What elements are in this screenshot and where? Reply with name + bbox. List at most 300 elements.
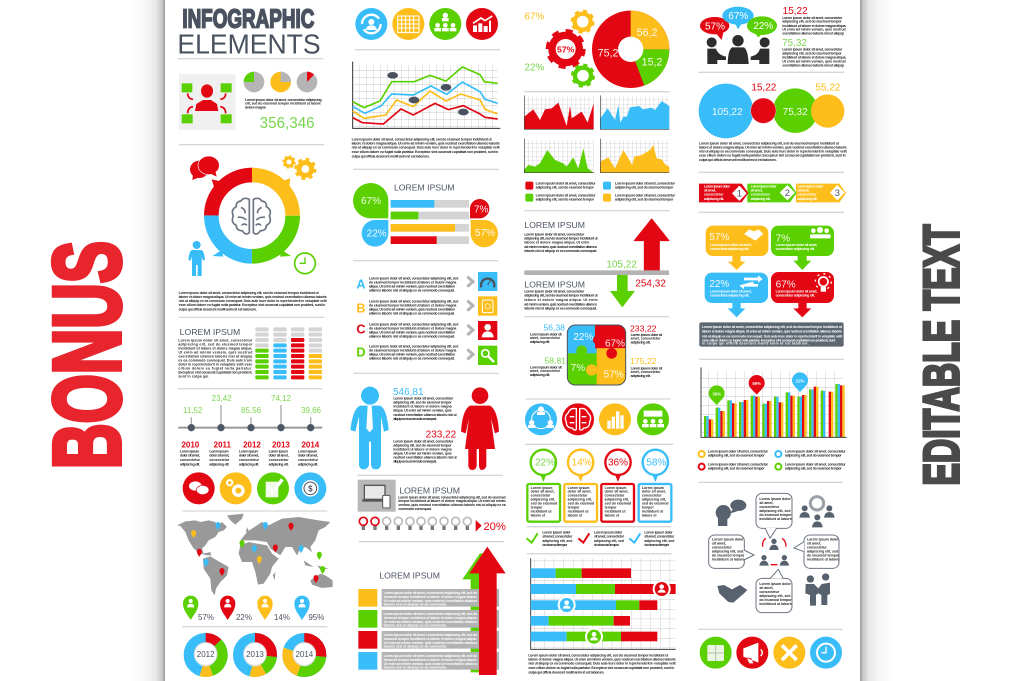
area chart legend: Lorem ipsum dolor sit amet, consectetur xyxy=(536,194,596,198)
list A B C D: aliqua. Ut enim ad minim veniam, quis nostrud exercitation xyxy=(369,352,455,356)
checklist: adipiscing elit, sed xyxy=(594,539,624,543)
list A B C D: D xyxy=(356,346,365,360)
card: red xyxy=(771,272,834,317)
checklist: do eiusmod tempor xyxy=(542,543,568,547)
callout rings with text boxes: dolor sit amet, xyxy=(531,490,555,494)
panel: stacked list with rising arrows: Ut enim ad minim veniam, quis nostrud exercitation ullamco xyxy=(384,599,477,603)
area chart legend: adipiscing elit, sed do eiusmod tempor xyxy=(536,198,595,202)
text block: cillum dolore eu fugiat nulla pariatur. xyxy=(178,366,252,370)
list A B C D: Lorem ipsum dolor sit amet, consectetur adipiscing elit, sed xyxy=(369,323,458,327)
callout rings with text boxes: incididunt ut xyxy=(605,509,626,513)
list A B C D: do eiusmod tempor incididunt ut labore et dolore magna xyxy=(369,280,456,284)
text block: esse cillum dolore eu fugiat nulla pariatur. Excepteur sint occaecat cupidatat non proident, sunt in xyxy=(528,666,674,670)
bubble chart: 105,22 xyxy=(712,107,743,118)
stat and text: 75,32 xyxy=(782,38,807,49)
timeline: dolor sit amet, xyxy=(298,454,318,458)
icon row: bottom xyxy=(700,637,842,669)
text block: nisi ut aliquip ex ea commodo consequat. Duis aute irure dolor in reprehenderit in voluptate velit xyxy=(699,150,847,154)
location pins with percentages xyxy=(183,596,324,622)
list A B C D: aliqua. Ut enim ad minim veniam, quis nostrud exercitation xyxy=(369,284,455,288)
icon row 1 xyxy=(183,472,326,504)
map pins xyxy=(191,522,325,583)
icon: two men shaking hands xyxy=(805,573,830,606)
text block: nisi ut aliquip ex ea commodo consequat. Duis aute irure dolor in reprehenderit in voluptate velit xyxy=(352,146,500,150)
callout rings with text boxes: labore et xyxy=(568,513,583,517)
panel: stacked list with rising arrows: eiusmod tempor incididunt ut labore et dolore magna aliqua. xyxy=(384,637,477,641)
timeline: consectetur xyxy=(180,458,201,462)
checklist: sit amet, consectetur xyxy=(594,535,625,539)
stat and text: adipiscing elit, sed do eiusmod tempor xyxy=(782,20,842,24)
icon row: top xyxy=(355,8,498,40)
speech box text: sit amet, xyxy=(807,542,821,546)
checklist xyxy=(527,530,675,547)
text block: tempor incididunt ut labore et dolore magna aliqua. Ut enim ad minim xyxy=(398,499,506,503)
speech box text: incididunt ut labore xyxy=(712,558,744,562)
speech box text: Lorem ipsum dolor xyxy=(759,497,792,501)
light bulb meter: 20% xyxy=(483,521,506,533)
icon: speech bubbles xyxy=(190,156,219,180)
text block: esse cillum dolore eu fugiat nulla pariatur. Excepteur sint occaecat cupidatat non proident, sunt in xyxy=(179,303,325,307)
heading: LOREM IPSUM xyxy=(399,486,460,496)
list A B C D: aliqua. Ut enim ad minim veniam, quis nostrud exercitation xyxy=(369,331,455,335)
timeline: 23,42 xyxy=(212,394,232,403)
numbered ribbon: consectetur xyxy=(704,193,724,197)
speech box text: do eiusmod tempor xyxy=(712,554,745,558)
timeline: dolor sit amet, xyxy=(209,454,229,458)
puzzle callouts: Lorem ipsum dolor sit xyxy=(530,365,562,369)
stat: blue value and text: adipiscing elit, sed do eiusmod tempor xyxy=(393,400,452,404)
text block: dolor in reprehenderit in voluptate velit esse xyxy=(178,362,252,366)
timeline: adipiscing elit. xyxy=(298,462,318,466)
side heading: BONUS: BONUS xyxy=(34,241,140,469)
dark text panel: Lorem ipsum dolor sit amet, consectetur adipiscing elit, sed do eiusmod tempor incididunt ut xyxy=(702,325,843,329)
speech box text: adipiscing elit, sed xyxy=(759,509,791,513)
timeline: Lorem ipsum xyxy=(209,450,229,454)
title xyxy=(177,4,321,59)
card: red: Lorem ipsum dolor sit amet, xyxy=(776,290,817,294)
stat and text: 15,22 xyxy=(783,6,808,17)
grouped bar chart: 89% xyxy=(752,381,761,386)
bar chart legend: adipiscing elit, sed do eiusmod tempor xyxy=(785,454,842,458)
text block: laboris nisi ut aliquip ex ea commodo consequat. xyxy=(524,307,597,311)
text block: ad minim veniam, quis nostrud exercitation ullamco xyxy=(524,302,597,306)
column 3 xyxy=(524,11,676,674)
numbered ribbon: 2 xyxy=(785,188,790,198)
dark text panel: labore et dolore magna aliqua. Ut enim ad minim veniam, quis nostrud exercitation ullamco laboris xyxy=(702,330,842,334)
puzzle callouts: amet, consectetur xyxy=(530,369,561,373)
numbered ribbon: adipiscing elit. xyxy=(797,197,817,201)
title: INFOGRAPHIC xyxy=(182,4,314,34)
pie chart: 75,2 xyxy=(598,48,618,60)
puzzle callouts xyxy=(530,323,663,378)
card: red: consectetur adipiscing elit. xyxy=(776,294,815,298)
callout rings with text boxes: tempor xyxy=(642,505,654,509)
panel: stacked list with rising arrows: eiusmod tempor incididunt ut labore et dolore magna aliqua. xyxy=(384,616,477,620)
donut charts by year: 2014 xyxy=(295,650,314,659)
text block xyxy=(179,291,327,311)
panel: stacked list with rising arrows: Lorem ipsum dolor sit amet, consectetur adipiscing elit, sed do xyxy=(384,612,477,616)
arrow down xyxy=(610,275,635,307)
callout rings with text boxes: adipiscing elit, xyxy=(605,497,629,501)
card: blue: 22% xyxy=(709,279,729,290)
speech bubbles with percentages: 22% xyxy=(753,21,773,32)
callout rings with text boxes: Lorem ipsum xyxy=(568,486,590,490)
icon row xyxy=(525,403,669,435)
puzzle callouts: adipiscing elit. xyxy=(530,340,550,344)
text block: adipiscing elit, sed do eiusmod tempor xyxy=(178,342,253,346)
list A B C D: C xyxy=(356,322,365,336)
speech box text: incididunt ut labore xyxy=(807,558,839,562)
card: blue: consectetur adipiscing elit. xyxy=(710,294,749,298)
text block: Lorem ipsum dolor sit amet, consectetur adipiscing elit, sed do eiusmod tempor incididunt ut xyxy=(699,141,840,145)
panel: stacked list with rising arrows: laboris nisi ut aliquip ex ea commodo. xyxy=(384,665,447,669)
puzzle callouts: 233,22 xyxy=(630,324,657,334)
timeline: Lorem ipsum xyxy=(298,450,317,454)
card: green xyxy=(771,226,834,270)
timeline: 11,52 xyxy=(183,406,203,415)
callout rings with text boxes: sed do eiusmod xyxy=(531,501,557,505)
text block: Lorem ipsum dolor sit amet, consectetur adipiscing elit, sed do eiusmod tempor incididunt ut xyxy=(352,137,492,141)
stat: red value and text: adipiscing elit, sed do eiusmod tempor xyxy=(393,443,452,447)
text block: ad minim veniam, quis nostrud exercitation ullamco xyxy=(524,245,597,249)
panel: stacked list with rising arrows: Lorem ipsum dolor sit amet, consectetur adipiscing elit, sed do xyxy=(384,633,477,637)
text block: culpa qui officia deserunt mollit anim id est laborum. xyxy=(352,154,430,158)
percent labels: 22% xyxy=(524,63,544,74)
world map xyxy=(177,514,333,595)
list A B C D: B xyxy=(356,302,365,316)
timeline: consectetur xyxy=(209,458,230,462)
text block xyxy=(398,495,506,511)
speech bubbles with percentages xyxy=(700,7,777,40)
text block: Lorem ipsum dolor sit amet, consectetur xyxy=(524,290,585,294)
puzzle callouts: 58,81 xyxy=(544,355,566,365)
heading: LOREM IPSUM xyxy=(379,570,440,580)
timeline xyxy=(178,394,322,466)
timeline: dolor sit amet, xyxy=(180,454,200,458)
text block xyxy=(524,290,598,311)
checklist: Lorem ipsum dolor xyxy=(594,530,623,534)
speech bubbles with percentages: 67% xyxy=(728,11,748,22)
segmented column meter xyxy=(255,327,322,379)
bar chart legend: adipiscing elit, sed do eiusmod tempor xyxy=(708,454,765,458)
timeline: dolor sit amet, xyxy=(269,454,289,458)
text block: Lorem ipsum dolor sit amet, consectetur adipiscing elit, sed do eiusmod tempor incididunt ut xyxy=(528,654,669,658)
callout rings with text boxes: adipiscing elit, xyxy=(568,497,592,501)
speech bubbles with percentages: 57% xyxy=(705,21,725,32)
horizontal stacked bar chart xyxy=(531,558,676,649)
list A B C D xyxy=(356,272,497,365)
puzzle callouts: amet, consectetur xyxy=(631,336,661,340)
dark text panel: in culpa qui officia deserunt mollit anim id est laborum. xyxy=(702,342,809,346)
stat: blue value and text: incididunt ut labore et dolore magna xyxy=(393,404,452,408)
text block: nisi ut aliquip ex ea commodo consequat. Duis aute irure dolor in reprehenderit in voluptate velit xyxy=(179,299,327,303)
panel: stacked list with rising arrows: laboris nisi ut aliquip ex ea commodo. xyxy=(384,644,447,648)
card: green: Lorem ipsum dolor sit amet, xyxy=(776,243,817,247)
heading: LOREM IPSUM xyxy=(180,327,240,337)
callout rings with text boxes: sed do eiusmod xyxy=(568,501,594,505)
puzzle callouts: adipiscing elit. xyxy=(530,373,550,377)
callout rings with text boxes: adipiscing elit, xyxy=(642,497,666,501)
callout rings with text boxes: dolor sit amet, xyxy=(605,490,629,494)
speech box text: do eiusmod tempor xyxy=(807,554,840,558)
text block xyxy=(178,338,253,378)
list A B C D: Lorem ipsum dolor sit amet, consectetur adipiscing elit, sed xyxy=(369,300,458,304)
small pie charts xyxy=(244,72,317,92)
area chart legend: adipiscing elit, sed do eiusmod tempor xyxy=(615,185,674,189)
timeline: 2010 xyxy=(181,441,200,450)
puzzle xyxy=(567,325,626,385)
timeline: adipiscing elit. xyxy=(269,462,289,466)
bar chart legend: Lorem ipsum dolor sit amet, consectetur xyxy=(785,462,846,466)
stat: red value and text: nostrud exercitation ullamco laboris nisi ut xyxy=(393,456,457,460)
percent labels xyxy=(524,11,544,74)
dark text panel: esse cillum dolore eu fugiat nulla pariatur. Excepteur sint occaecat cupidatat non proident, sunt xyxy=(702,338,836,342)
panel: stacked list with rising arrows: laboris nisi ut aliquip ex ea commodo. xyxy=(384,602,447,606)
checklist: adipiscing elit, sed xyxy=(644,539,674,543)
text block: esse cillum dolore eu fugiat nulla pariatur. Excepteur sint occaecat cupidatat non proident, sunt in xyxy=(699,154,846,158)
text block: Ut enim ad minim veniam, quis nostrud xyxy=(178,350,252,354)
arrow up xyxy=(634,219,669,270)
icon: head with speech bubble xyxy=(716,500,746,526)
speech box text: sit amet, xyxy=(759,501,774,505)
text block: culpa qui officia deserunt mollit anim id est laborum. xyxy=(699,158,777,162)
panel: stacked list with rising arrows: Ut enim ad minim veniam, quis nostrud exercitation ullamco xyxy=(384,662,477,666)
callout rings with text boxes: sed do eiusmod xyxy=(605,501,631,505)
numbered ribbon: consectetur xyxy=(797,193,817,197)
callout rings with text boxes: Lorem ipsum xyxy=(531,486,553,490)
numbered ribbon: sit amet, xyxy=(704,189,716,193)
puzzle callouts: Lorem ipsum dolor sit xyxy=(530,332,562,336)
timeline: 2014 xyxy=(301,441,320,450)
checklist: Lorem ipsum dolor xyxy=(644,530,673,534)
progress bars with percent badges: 67% xyxy=(361,196,381,207)
text block xyxy=(245,98,322,109)
stat and text: incididunt ut labore et dolore magna aliqua. xyxy=(782,24,846,28)
numbered ribbon: consectetur xyxy=(751,193,771,197)
speech box text: do eiusmod tempor xyxy=(759,598,792,602)
value: 254,32 xyxy=(635,279,666,290)
panel: stacked list with rising arrows: eiusmod tempor incididunt ut labore et dolore magna aliqua. xyxy=(384,658,477,662)
text block: Lorem ipsum dolor sit amet, consectetur adipiscing xyxy=(245,98,322,102)
callout rings with text boxes: Lorem ipsum xyxy=(642,486,664,490)
timeline: adipiscing elit. xyxy=(180,462,200,466)
callout rings with text boxes: 36% xyxy=(608,458,628,469)
heading: LOREM IPSUM xyxy=(394,182,455,192)
bar chart legend: Lorem ipsum dolor sit amet, consectetur xyxy=(785,450,846,454)
text block: incididunt ut labore et dolore magna aliqua. xyxy=(178,346,252,350)
bar chart legend: Lorem ipsum dolor sit amet, consectetur xyxy=(708,450,769,454)
speech box text xyxy=(712,497,840,606)
column 2 xyxy=(350,8,506,675)
list A B C D: do eiusmod tempor incididunt ut labore et dolore magna xyxy=(369,304,456,308)
bar chart legend: Lorem ipsum dolor sit amet, consectetur xyxy=(708,462,769,466)
stat: blue value and text: 546,81 xyxy=(393,387,424,398)
checklist: sit amet, consectetur xyxy=(542,535,573,539)
bar chart legend: adipiscing elit, sed do eiusmod tempor xyxy=(708,466,765,470)
text block: veniam, quis nostrud exercitation ullamco laboris nisi ut aliquip ex ea xyxy=(398,503,506,507)
list A B C D: ullamco laboris nisi ut aliquip ex ea commodo consequat. xyxy=(369,356,455,360)
bubble chart: 15,22 xyxy=(751,83,777,94)
card: blue: Lorem ipsum dolor sit amet, xyxy=(710,290,752,294)
stat and text xyxy=(782,38,846,67)
speech box text: consectetur xyxy=(712,546,732,550)
timeline: 85,56 xyxy=(241,406,262,415)
callout rings with text boxes xyxy=(527,450,671,522)
area chart legend: Lorem ipsum dolor sit amet, consectetur xyxy=(536,181,596,185)
icon: brain and people xyxy=(799,497,835,527)
text block xyxy=(352,137,500,158)
pie chart: 56,2 xyxy=(637,27,657,39)
stat: red value and text xyxy=(393,429,457,463)
stat and text: Lorem ipsum dolor sit amet, consectetur xyxy=(782,48,843,52)
bubble chart xyxy=(699,83,844,138)
panel: stacked list with rising arrows xyxy=(358,547,506,675)
callout rings with text boxes: tempor xyxy=(568,505,580,509)
text block: Lorem ipsum dolor sit amet, consectetur xyxy=(524,233,585,237)
speech box text: incididunt ut labore xyxy=(759,517,792,521)
timeline: adipiscing elit. xyxy=(209,462,229,466)
speech box text: adipiscing elit, sed xyxy=(807,550,838,554)
text block: nisi ut aliquip ex ea commodo consequat. Duis aute irure dolor in reprehenderit in voluptate velit xyxy=(528,662,676,666)
stat and text: Lorem ipsum dolor sit amet, consectetur xyxy=(782,16,843,20)
text block: dolore magna xyxy=(245,105,266,109)
area chart legend: adipiscing elit, sed do eiusmod tempor xyxy=(536,185,595,189)
panel: stacked list with rising arrows: Ut enim ad minim veniam, quis nostrud exercitation ullamco xyxy=(384,620,477,624)
speech box text: incididunt ut labore xyxy=(759,602,792,606)
puzzle callouts: amet, consectetur xyxy=(530,336,561,340)
location pins with percentages: 57% xyxy=(198,613,214,622)
callout rings with text boxes: adipiscing elit, xyxy=(531,497,555,501)
area charts xyxy=(524,95,669,173)
puzzle callouts: adipiscing elit. xyxy=(631,340,651,344)
list A B C D: ullamco laboris nisi ut aliquip ex ea commodo consequat. xyxy=(369,312,455,316)
puzzle callouts: 56,38 xyxy=(543,323,565,333)
text block: elit, sed do eiusmod tempor incididunt ut labore xyxy=(245,102,321,106)
percent labels: 67% xyxy=(524,11,544,22)
list A B C D: A xyxy=(356,278,365,292)
text block: labore et dolore magna aliqua. Ut enim ad minim veniam, quis nostrud exercitation ullamco laboris xyxy=(352,142,500,146)
stat: blue value and text: aliqua. Ut enim ad minim veniam, quis xyxy=(393,409,452,413)
card: green: 7% xyxy=(776,233,790,244)
stat and text: Ut enim ad minim veniam, quis nostrud xyxy=(782,59,846,63)
stat and text: incididunt ut labore et dolore magna aliqua. xyxy=(782,55,846,59)
numbered ribbon: Lorem ipsum dolor xyxy=(751,185,777,189)
icon: female figure xyxy=(461,387,499,470)
text block: adipiscing elit, sed do eiusmod tempor incididunt ut xyxy=(524,294,598,298)
stat: red value and text: Lorem ipsum dolor sit amet, consectetur xyxy=(393,439,454,443)
speech box text: consectetur xyxy=(807,546,827,550)
callout rings with text boxes: 22% xyxy=(535,458,555,469)
timeline: consectetur xyxy=(239,458,260,462)
heading: LOREM IPSUM xyxy=(524,279,585,289)
numbered ribbon: 1 xyxy=(737,189,742,199)
list A B C D: ullamco laboris nisi ut aliquip ex ea commodo consequat. xyxy=(369,335,455,339)
puzzle callouts: adipiscing elit. xyxy=(631,374,651,378)
gears xyxy=(548,11,594,86)
card: yellow: consectetur adipiscing elit. xyxy=(710,247,749,251)
progress bars with percent badges: 7% xyxy=(474,204,489,215)
timeline: 2011 xyxy=(214,441,232,450)
speech box text: Lorem ipsum dolor xyxy=(807,538,839,542)
card: yellow: 57% xyxy=(709,232,729,243)
stat and text: Ut enim ad minim veniam, quis nostrud xyxy=(782,28,846,32)
progress bars with percent badges xyxy=(353,183,498,247)
stat: red value and text: incididunt ut labore et dolore magna xyxy=(393,447,452,451)
donut charts by year xyxy=(189,638,321,672)
numbered ribbon: adipiscing elit. xyxy=(704,197,724,201)
donut charts by year: 2013 xyxy=(246,650,264,659)
numbered ribbon: Lorem ipsum dolor xyxy=(797,185,824,189)
central people and arrows xyxy=(759,538,789,566)
card: yellow: Lorem ipsum dolor sit amet, xyxy=(710,243,752,247)
text block: culpa qui officia deserunt mollit anim id est laborum. xyxy=(179,307,257,311)
pie chart: 15,2 xyxy=(642,57,662,69)
text block: ex ea commodo consequat. Duis aute irure xyxy=(178,358,252,362)
area chart legend: Lorem ipsum dolor sit amet, consectetur xyxy=(615,181,676,185)
stat: blue value and text: nostrud exercitation ullamco laboris nisi ut xyxy=(393,413,457,417)
title: ELEMENTS xyxy=(177,28,321,59)
icon: clock xyxy=(295,253,315,274)
stat: blue value and text: aliquip ex ea commodo consequat. xyxy=(393,417,437,421)
text block: labore et dolore magna aliqua. Ut enim ad minim veniam, quis nostrud exercitation ullamco laboris xyxy=(699,145,847,149)
list A B C D: aliqua. Ut enim ad minim veniam, quis nostrud exercitation xyxy=(369,308,455,312)
panel: stacked list with rising arrows: Ut enim ad minim veniam, quis nostrud exercitation ullamco xyxy=(384,641,477,645)
progress bars with percent badges: 57% xyxy=(475,228,495,239)
bubble chart: 55,22 xyxy=(815,83,841,94)
panel: person with linked squares xyxy=(179,74,236,130)
text block: commodo consequat. xyxy=(398,507,432,511)
timeline: 74,12 xyxy=(271,394,292,403)
puzzle callouts: amet, consectetur xyxy=(631,370,661,374)
text block: labore et dolore magna aliqua. Ut enim xyxy=(524,298,598,302)
icon: handshake xyxy=(717,585,747,603)
card: blue xyxy=(705,273,768,317)
speech box text: adipiscing elit, sed xyxy=(759,594,791,598)
callout rings with text boxes: consectetur xyxy=(642,494,662,498)
pie chart xyxy=(592,11,669,88)
donut charts by year: 2012 xyxy=(197,650,215,659)
speech box text: consectetur xyxy=(759,505,780,509)
area chart legend: Lorem ipsum dolor sit amet, consectetur xyxy=(615,194,676,198)
timeline: 2013 xyxy=(272,441,290,450)
speech box text: Lorem ipsum dolor xyxy=(759,582,792,586)
timeline: consectetur xyxy=(269,458,289,462)
checklist: sit amet, consectetur xyxy=(644,535,675,539)
numbered ribbon: adipiscing elit. xyxy=(751,197,771,201)
column 4 xyxy=(698,6,847,669)
stat: red value and text: aliqua. Ut enim ad minim veniam, quis xyxy=(393,452,452,456)
bar chart legend: adipiscing elit, sed do eiusmod tempor xyxy=(785,466,842,470)
panel: stacked list with rising arrows: Lorem ipsum dolor sit amet, consectetur adipiscing elit, sed do xyxy=(384,654,477,658)
callout rings with text boxes: 14% xyxy=(572,458,592,469)
grouped bar chart xyxy=(701,367,847,437)
text block: Lorem ipsum dolor sit amet, consectetur xyxy=(178,338,253,342)
puzzle: 22% xyxy=(573,332,593,343)
callout rings with text boxes: labore et xyxy=(642,513,657,517)
light bulb meter xyxy=(359,517,506,533)
card: red: 67% xyxy=(776,280,796,291)
area chart legend xyxy=(525,181,676,202)
callout rings with text boxes: Lorem ipsum xyxy=(605,486,627,490)
stat: blue value and text: Lorem ipsum dolor sit amet, consectetur xyxy=(393,396,454,400)
panel: stacked list with rising arrows: Lorem ipsum dolor sit amet, consectetur adipiscing elit, sed do xyxy=(384,591,477,595)
location pins with percentages: 14% xyxy=(274,613,290,622)
timeline: 2012 xyxy=(243,441,261,450)
text block: labore et dolore magna aliqua. Ut enim ad minim veniam, quis nostrud exercitation ullamco laboris xyxy=(179,295,327,299)
baseline bar xyxy=(524,270,669,275)
timeline: 39,66 xyxy=(301,406,322,415)
callout rings with text boxes: labore et xyxy=(531,513,546,517)
